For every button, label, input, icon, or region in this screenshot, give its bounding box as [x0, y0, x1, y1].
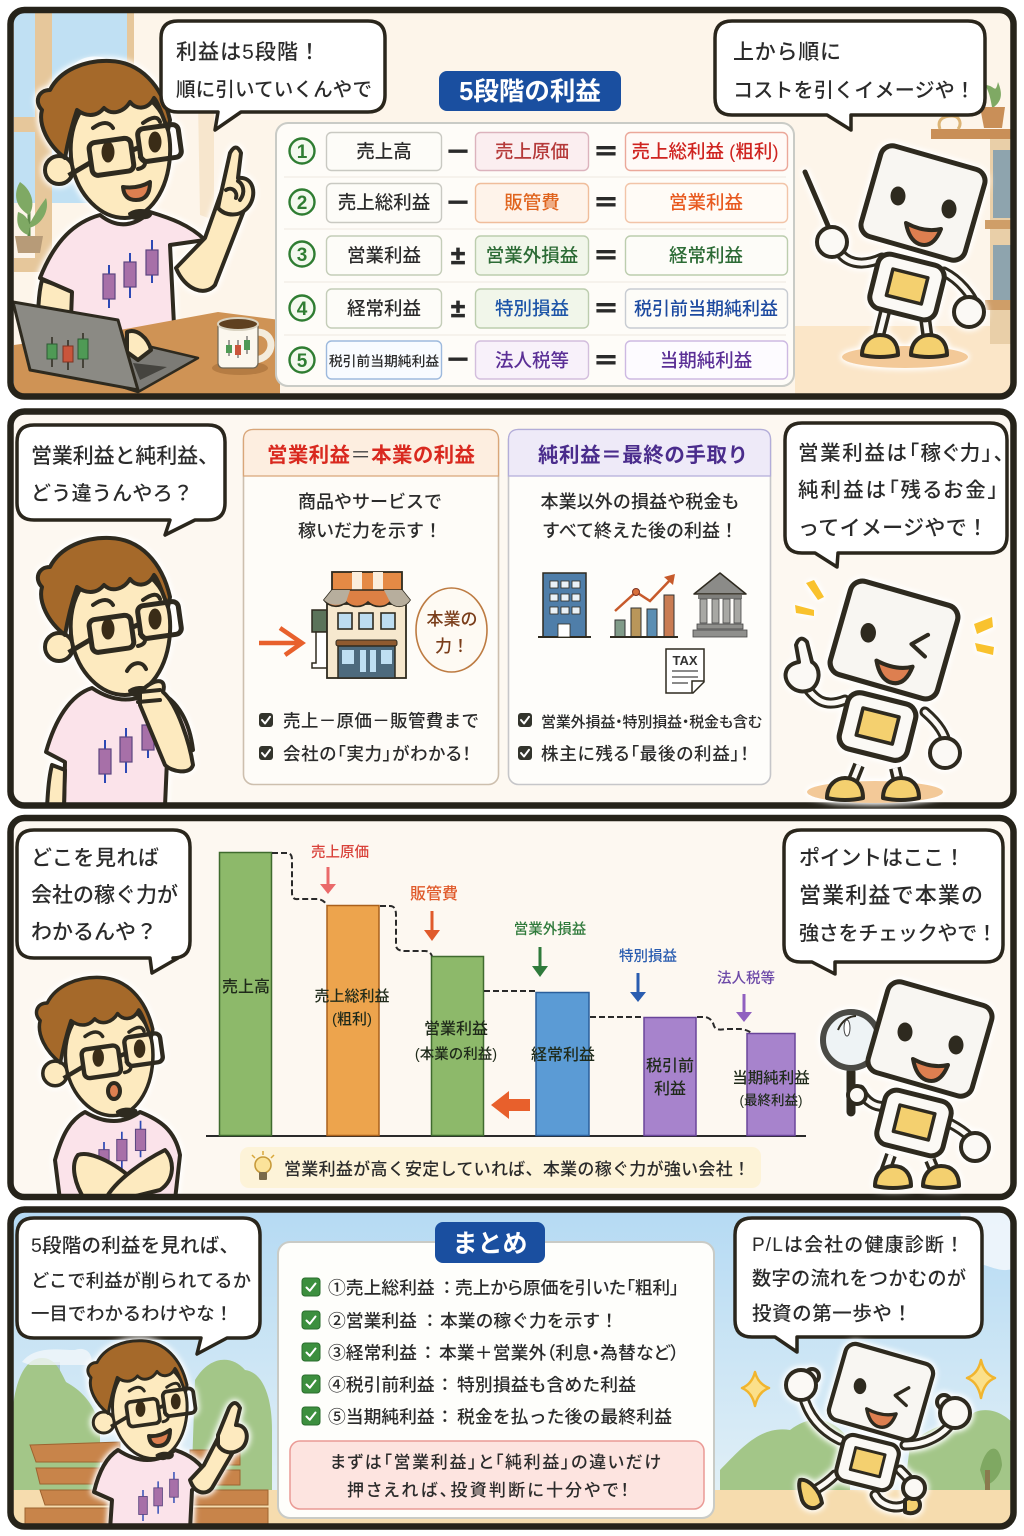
card: operating profit: [244, 430, 498, 784]
bar labels: (本業の利益): [415, 1046, 497, 1063]
row 5: 税引前当期純利益: [329, 353, 439, 369]
head: [38, 538, 183, 697]
bar labels: 営業利益: [424, 1020, 488, 1038]
icon: bank: [693, 573, 747, 637]
row 1: －: [445, 137, 471, 167]
speech bubble: robot: P/Lは会社の健康診断！: [752, 1234, 964, 1256]
head: [88, 1341, 197, 1460]
summary list: ①売上総利益: [328, 1278, 435, 1298]
checklist: 株主に残る「最後の利益」！: [541, 744, 749, 764]
cost labels and arrows: 特別損益: [619, 948, 677, 965]
icon: light bulb: [252, 1151, 274, 1180]
summary list: 本業の稼ぐ力を示す！: [440, 1311, 618, 1331]
frame: [10, 412, 1014, 806]
tip bar: [240, 1147, 761, 1188]
speech bubble: robot: 数字の流れをつかむのが: [752, 1268, 966, 1290]
title: five levels of profit: 5段階の利益: [459, 78, 601, 106]
speech bubble: man asks: [17, 830, 190, 973]
row 2: ＝: [593, 188, 619, 218]
frame: [10, 10, 1014, 396]
cost labels and arrows: 法人税等: [717, 969, 775, 987]
callout: [290, 1441, 704, 1509]
title: five levels of profit: [439, 71, 621, 111]
shirt candlesticks: [103, 240, 158, 308]
panel 1: five levels of profit: [10, 10, 1015, 397]
panel 2: operating vs net profit: [10, 411, 1014, 806]
callout: まずは「営業利益」と「純利益」の違いだけ: [330, 1453, 661, 1472]
card heading: 営業利益＝本業の利益: [267, 444, 476, 467]
speech bubble: man asks: わかるんや？: [31, 921, 157, 944]
summary list: ：: [436, 1375, 454, 1395]
description: [298, 492, 442, 541]
badge: core business strength: [416, 588, 487, 672]
row 3: [290, 236, 788, 275]
bar labels: [222, 978, 810, 1108]
speech bubble: man asks: 会社の稼ぐ力が: [31, 884, 178, 907]
sparkle marks: [795, 580, 994, 655]
checklist: 売上－原価－販管費まで: [283, 711, 479, 731]
checklist: [259, 711, 479, 764]
t-shirt: [46, 688, 193, 806]
badge: core business strength: 本業の: [426, 610, 478, 629]
profit formula table: [276, 123, 794, 386]
bar labels: 税引前: [646, 1057, 694, 1075]
summary list: ②営業利益: [328, 1311, 417, 1331]
speech bubble: man: 順に引いていくんやで: [176, 79, 372, 101]
character: robot with pointer: [805, 143, 988, 368]
checklist: 営業外損益・特別損益・税金も含む: [541, 714, 762, 731]
head: [38, 61, 183, 220]
row 2: 売上総利益: [338, 192, 431, 213]
icon: tax document: [666, 649, 704, 693]
speech bubble: man question: どう違うんやろ？: [31, 482, 193, 505]
raised arm and hand: [190, 1430, 240, 1493]
raised arm and hand: [176, 190, 248, 291]
speech bubble: man: 5段階の利益を見れば、: [31, 1235, 239, 1257]
shirt candlesticks: [98, 724, 155, 783]
tip bar: 営業利益が高く安定していれば、本業の稼ぐ力が強い会社！: [284, 1159, 750, 1179]
summary card: [278, 1222, 714, 1518]
panel 4: summary: [10, 1207, 1015, 1530]
t-shirt: [94, 1450, 210, 1530]
sparkles: [742, 1360, 995, 1406]
card header: [244, 430, 498, 476]
hand and arm on chin: [140, 681, 193, 771]
description: [540, 492, 740, 541]
row 4: 税引前当期純利益: [634, 299, 778, 319]
icon: shop: [312, 572, 410, 678]
summary list: 特別損益も含めた利益: [457, 1375, 636, 1395]
character: man pointing on bench: [88, 1341, 247, 1530]
character: robot winking: [786, 578, 994, 803]
panel 3: where to see earning power: [10, 818, 1014, 1200]
speech bubble: robot point: 営業利益で本業の: [799, 883, 983, 908]
cost labels and arrows: [311, 844, 775, 1022]
summary list: 税金を払った後の最終利益: [457, 1407, 672, 1427]
speech bubble: robot: [715, 21, 985, 130]
row 2: －: [445, 188, 471, 218]
speech bubble: robot point: 強さをチェックやで！: [799, 922, 997, 945]
coffee mug: [212, 318, 271, 375]
row 5: [290, 341, 788, 379]
title: summary: [435, 1222, 545, 1263]
row 5: －: [445, 345, 471, 375]
badge: core business strength: 力！: [435, 637, 469, 656]
row 2: 営業利益: [669, 192, 743, 213]
waterfall chart: [206, 844, 810, 1136]
row 3: 経常利益: [669, 245, 743, 266]
checklist: 会社の「実力」がわかる！: [283, 744, 471, 764]
row 1: ＝: [593, 137, 619, 167]
summary list: ③経常利益: [328, 1343, 417, 1363]
row 1: [290, 132, 788, 170]
speech bubble: robot: [735, 1218, 982, 1352]
character: robot with magnifier: [823, 979, 995, 1188]
row 4: [290, 289, 788, 328]
icon: tax document: TAX: [672, 653, 698, 668]
title: summary: まとめ: [452, 1230, 528, 1258]
row 4: 4: [297, 299, 308, 320]
crossed arms: [72, 1152, 127, 1194]
summary list: ④税引前利益: [328, 1375, 435, 1395]
summary list: 売上から原価を引いた「粗利」: [455, 1278, 679, 1298]
row 4: ±: [451, 293, 465, 323]
bar labels: 利益: [654, 1080, 686, 1098]
axis: [206, 1135, 806, 1137]
speech bubble: man question: [17, 425, 225, 535]
row 5: 当期純利益: [660, 350, 753, 371]
speech bubble: man: [17, 1218, 260, 1354]
speech bubble: robot point: ポイントはここ！: [799, 847, 965, 870]
row 1: 売上総利益 (粗利): [632, 141, 778, 162]
frame: [10, 1210, 1014, 1526]
speech bubble: man: 利益は5段階！: [176, 41, 320, 64]
row 3: 営業外損益: [486, 245, 579, 266]
description: すべて終えた後の利益！: [542, 521, 738, 541]
mouth: [149, 1430, 170, 1446]
magnifier: [823, 1012, 879, 1112]
row 3: 3: [297, 245, 307, 266]
row 2: [290, 184, 788, 222]
row 2: 販管費: [504, 192, 560, 213]
bar labels: 売上総利益: [314, 988, 390, 1005]
summary list: ⑤当期純利益: [328, 1407, 435, 1427]
summary list: ：: [419, 1343, 437, 1363]
dashed connectors: [272, 853, 752, 1033]
head: [36, 977, 164, 1118]
cost labels and arrows: 営業外損益: [514, 921, 587, 938]
summary list: [302, 1278, 679, 1427]
park scenery: [10, 1207, 1015, 1527]
shirt candlesticks: [98, 1120, 146, 1169]
description: 稼いだ力を示す！: [298, 521, 442, 541]
pointing hand: [786, 639, 819, 691]
row 5: 5: [297, 351, 308, 372]
summary list: ：: [421, 1311, 439, 1331]
speech bubble: man: どこで利益が削られてるか: [31, 1270, 251, 1291]
summary list: ：: [438, 1278, 456, 1298]
frame: [10, 818, 1014, 1197]
speech bubble: robot: コストを引くイメージや！: [733, 79, 975, 102]
bars: [220, 852, 795, 1136]
row 1: 売上原価: [495, 141, 569, 162]
description: 本業以外の損益や税金も: [540, 492, 740, 512]
t-shirt: [55, 1112, 180, 1200]
character: man pointing: [38, 61, 253, 345]
laptop: [13, 302, 198, 392]
window with sky: [14, 13, 214, 272]
speech bubble: robot explains: 営業利益は「稼ぐ力」、: [798, 442, 1004, 465]
row 2: 2: [297, 193, 307, 214]
card: net profit: [508, 430, 770, 784]
row 4: 経常利益: [347, 298, 421, 319]
description: 商品やサービスで: [298, 492, 442, 512]
icon: growth chart: [610, 574, 678, 637]
floor and shelf: [795, 82, 1015, 397]
speech bubble: robot explains: 純利益は「残るお金」: [798, 479, 998, 502]
summary list: ：: [436, 1407, 454, 1427]
shirt candlesticks: [139, 1472, 178, 1521]
speech bubble: man: [161, 21, 385, 130]
bar labels: 売上高: [222, 978, 270, 996]
mouth: [123, 182, 150, 200]
row 3: ±: [451, 240, 465, 270]
character: man with arms crossed: [36, 977, 180, 1200]
speech bubble: robot: 投資の第一歩や！: [752, 1303, 912, 1325]
cost labels and arrows: 販管費: [410, 885, 458, 903]
row 5: ＝: [593, 346, 619, 376]
bench: [25, 1442, 268, 1527]
character: robot jumping: [786, 1342, 970, 1513]
mouth: [127, 663, 146, 671]
bar labels: (粗利): [332, 1011, 372, 1028]
character: man thinking: [38, 538, 193, 806]
row 5: 法人税等: [495, 350, 569, 371]
open mouth: [108, 1083, 120, 1099]
speech bubble: robot point: [784, 830, 1003, 974]
cost labels and arrows: 売上原価: [311, 844, 369, 861]
speech bubble: man asks: どこを見れば: [31, 847, 159, 870]
speech bubble: robot: 上から順に: [733, 41, 841, 64]
row 1: 売上高: [356, 141, 412, 162]
plant by the window: [15, 182, 47, 253]
speech bubble: robot explains: ってイメージやで！: [798, 517, 988, 540]
speech bubble: man: 一目でわかるわけやな！: [31, 1303, 233, 1324]
bar labels: 当期純利益: [732, 1069, 810, 1087]
row 3: ＝: [593, 241, 619, 271]
row 4: ＝: [593, 294, 619, 324]
callout: 押さえれば、投資判断に十分やで！: [347, 1481, 629, 1500]
bar labels: 経常利益: [531, 1046, 595, 1064]
card heading: 純利益＝最終の手取り: [538, 444, 748, 467]
row 1: 1: [297, 142, 308, 163]
t-shirt: [40, 212, 205, 345]
speech bubble: robot explains: [785, 423, 1007, 567]
red arrow to operating profit: [491, 1091, 530, 1119]
checklist: [518, 713, 762, 764]
card header: [508, 430, 770, 476]
row 3: 営業利益: [347, 245, 421, 266]
arrow into shop: [259, 628, 302, 655]
summary list: 本業＋営業外（利息・為替など）: [439, 1342, 679, 1363]
row 4: 特別損益: [495, 298, 569, 319]
table: [14, 312, 280, 397]
speech bubble: man question: 営業利益と純利益、: [31, 445, 219, 468]
icon: office building: [538, 573, 591, 637]
bar labels: (最終利益): [740, 1093, 802, 1108]
